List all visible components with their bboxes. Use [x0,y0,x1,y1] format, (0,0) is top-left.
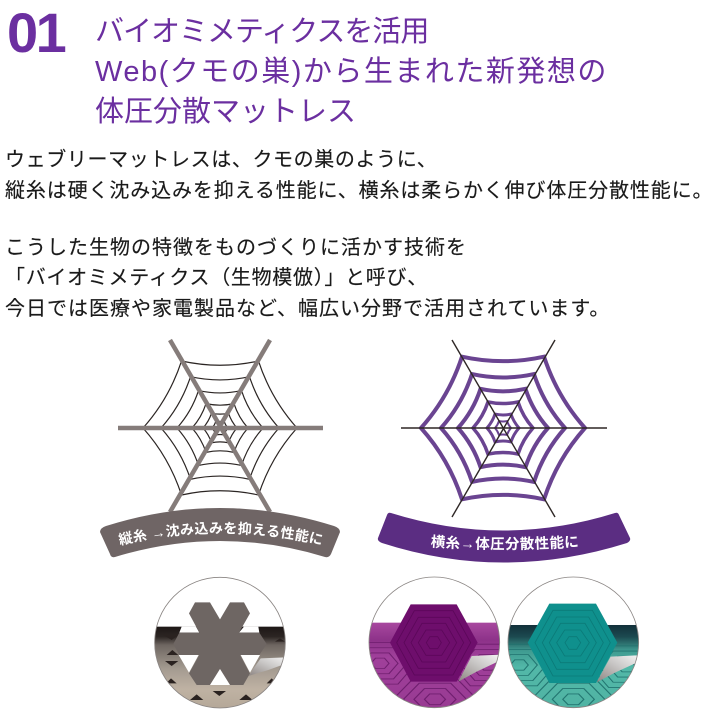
title: 体圧分散マットレス [95,96,356,128]
text block: intro [5,148,713,202]
banner: warp threads: 縦糸 →沈み込みを抑える性能に [118,522,322,546]
text block: biomimetics: こうした生物の特徴をものづくりに活かす技術を [5,237,467,259]
text block: biomimetics: 「バイオミメティクス（生物模倣）」と呼び、 [5,267,428,289]
snowflake hexagon [173,602,267,685]
title: Web(クモの巣)から生まれた新発想の [95,56,608,88]
circle: warp cross-section [153,577,287,710]
circle: teal cross-section [508,576,640,708]
banner: weft threads [378,512,630,562]
banner: weft threads: 横糸→体圧分散性能に [431,534,578,550]
banner: warp threads [100,508,340,558]
number 01: 01 [7,1,64,64]
title: バイオミメティクスを活用 [95,16,428,48]
text block: biomimetics: 今日では医療や家電製品など、幅広い分野で活用されています。 [5,298,610,320]
text block: intro: ウェブリーマットレスは、クモの巣のように、 [5,149,437,171]
spider web: purple weft threads [401,340,607,517]
purple hexagon [390,604,478,682]
illustrations [100,338,640,708]
text block: biomimetics [5,236,610,320]
circle: purple cross-section [368,576,500,708]
spider web: gray warp threads [118,340,323,512]
text block: intro: 縦糸は硬く沈み込みを抑える性能に、横糸は柔らかく伸び体圧分散性能に。 [5,180,713,202]
title [95,16,608,128]
teal hexagon [528,604,617,683]
